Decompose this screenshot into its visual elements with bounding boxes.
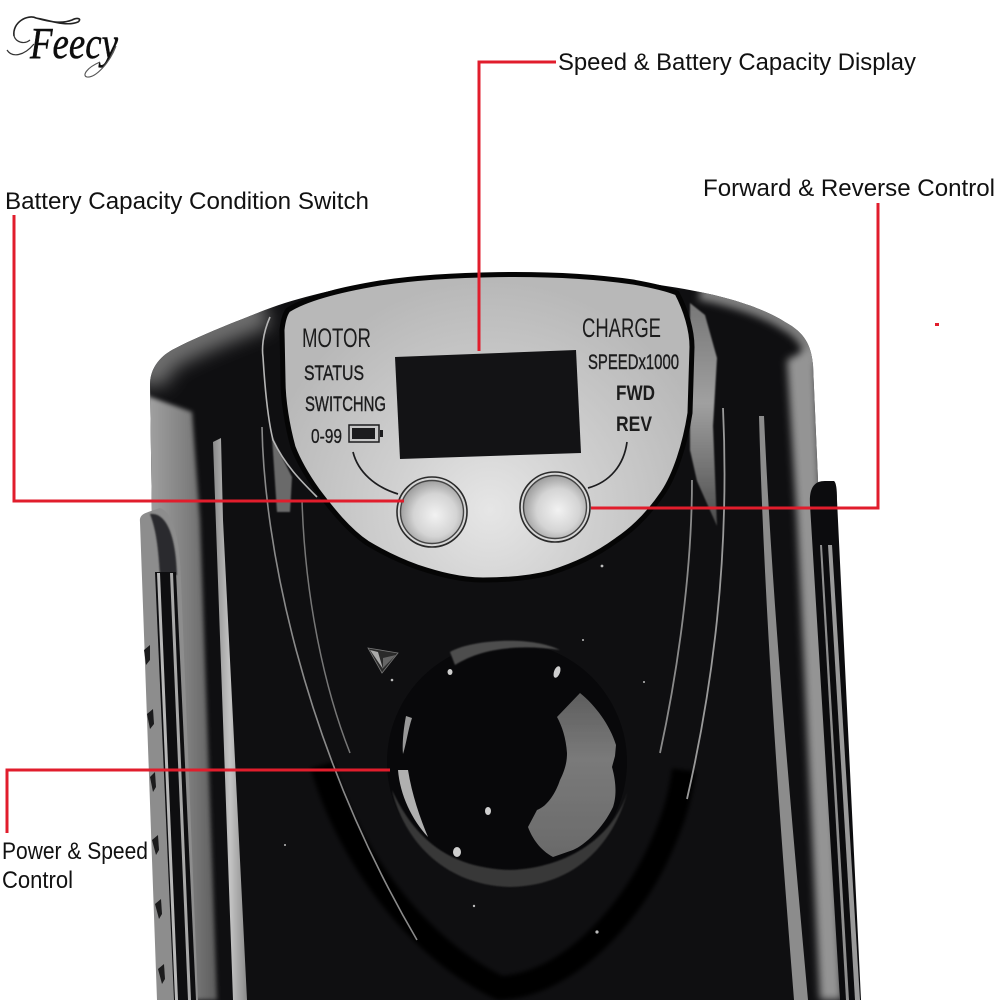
callout: Power & Speed Control: Power & Speed bbox=[2, 838, 148, 865]
callout: Power & Speed Control bbox=[2, 770, 390, 894]
panel labels: right: FWD bbox=[616, 382, 655, 405]
knob reflection: left lower bbox=[398, 770, 428, 837]
icon: battery bbox=[349, 425, 383, 442]
control panel: silver faceplate bbox=[263, 275, 692, 580]
panel labels: right: REV bbox=[616, 413, 652, 436]
side rib: right bbox=[810, 481, 861, 1000]
specks on body bbox=[284, 565, 645, 934]
panel labels: right bbox=[582, 313, 679, 436]
callout: Battery Capacity Condition Switch: Battery Capacity Condition Switch bbox=[5, 188, 369, 215]
callout: Forward & Reverse Control: Forward & Reverse Control bbox=[703, 175, 995, 202]
panel bracket arcs bbox=[353, 442, 627, 494]
display screen bbox=[395, 350, 581, 459]
product body bbox=[150, 274, 840, 1000]
panel labels: left: 0-99 bbox=[311, 426, 342, 448]
button: right bbox=[520, 472, 590, 542]
knob top rim highlight bbox=[450, 641, 560, 665]
callout: Power & Speed Control: Control bbox=[2, 867, 73, 894]
panel labels: left: STATUS bbox=[304, 362, 364, 385]
panel labels: left bbox=[302, 323, 386, 448]
knob grip dots bbox=[448, 665, 562, 857]
knob reflection: left upper bbox=[403, 716, 412, 754]
button: left bbox=[397, 477, 467, 547]
logo: Feecy script wordmark bbox=[7, 17, 118, 77]
callout: Speed & Battery Capacity Display bbox=[479, 49, 916, 351]
callout: Speed & Battery Capacity Display: Speed & Battery Capacity Display bbox=[558, 49, 916, 76]
panel outline highlight bbox=[263, 317, 317, 497]
knob reflection: right crescent bbox=[528, 693, 616, 857]
power and speed knob bbox=[387, 641, 628, 887]
panel labels: right: SPEEDx1000 bbox=[588, 351, 679, 374]
body highlights and stripes bbox=[145, 292, 842, 1000]
panel labels: left: MOTOR bbox=[302, 323, 371, 353]
logo: Feecy script wordmark: Feecy bbox=[29, 19, 118, 68]
panel labels: left: SWITCHNG bbox=[305, 393, 386, 416]
side rib: left with vent notches bbox=[140, 508, 198, 1000]
callout: Forward & Reverse Control bbox=[591, 175, 995, 508]
stray red dot bbox=[935, 323, 939, 326]
icon: direction triangle bbox=[368, 648, 398, 673]
callout: Battery Capacity Condition Switch bbox=[5, 188, 404, 501]
panel labels: right: CHARGE bbox=[582, 313, 661, 343]
knob lower rim bbox=[392, 790, 628, 887]
